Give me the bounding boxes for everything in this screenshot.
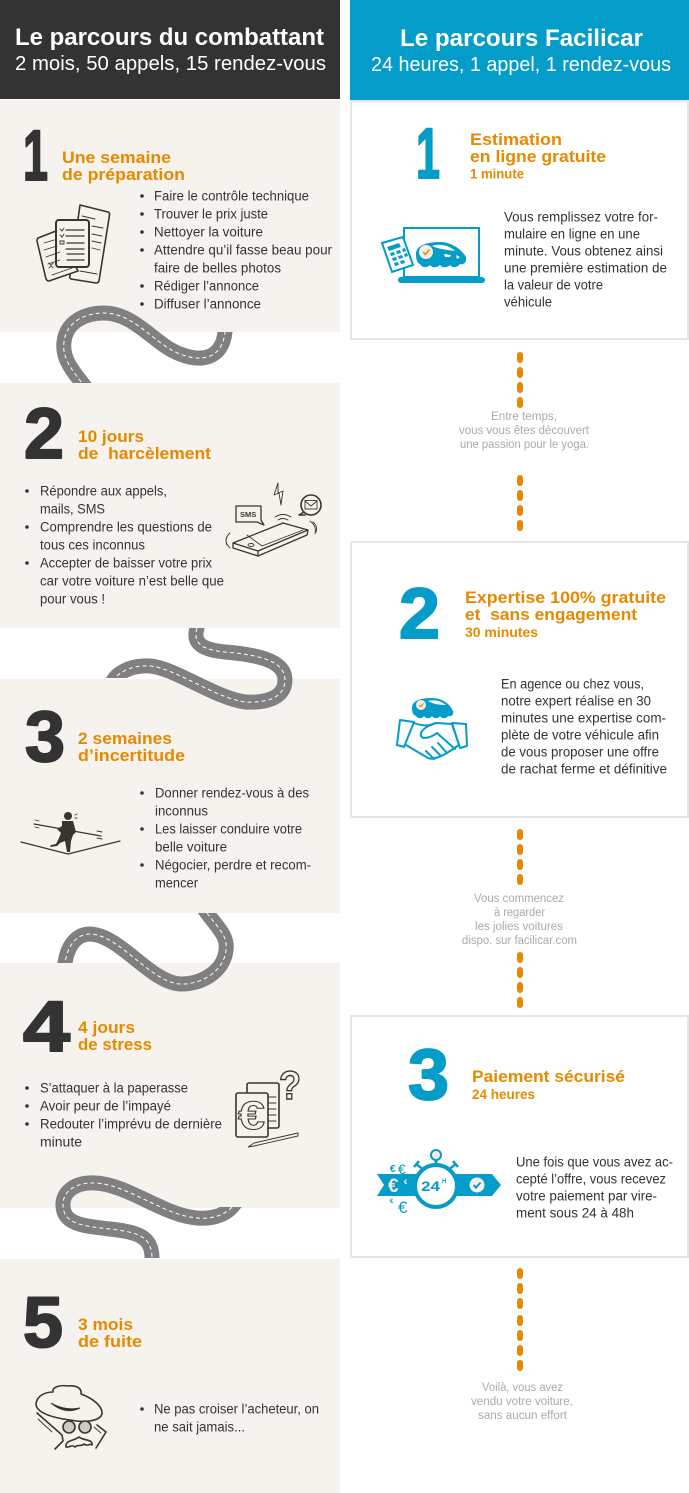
description: online form: mulaire en ligne en une	[504, 226, 640, 242]
heading: 10 jours de harcèlement: 10 jours	[78, 427, 144, 446]
list: uncertainty tasks: inconnus	[155, 804, 208, 818]
heading: 4 jours de stress	[78, 1018, 152, 1054]
description: online form: Vous remplissez votre for-	[504, 210, 658, 224]
list: stress tasks: Redouter l’imprévu de dernière	[40, 1116, 222, 1132]
list: harassment tasks: mails, SMS	[40, 502, 105, 516]
icon: euro paperwork: €	[238, 1094, 265, 1138]
heading: estimation en ligne gratuite: Estimation	[470, 130, 562, 149]
number 2 blue: 2	[399, 575, 440, 654]
heading: 2 semaines d'incertitude	[78, 729, 185, 765]
heading: 10 jours de harcèlement: de harcèlement	[78, 444, 211, 463]
heading: paiement sécurisé	[472, 1067, 625, 1102]
heading: une semaine de préparation	[62, 148, 185, 184]
list: preparation tasks: Nettoyer la voiture	[154, 224, 263, 240]
heading: estimation en ligne gratuite: en ligne gratuite	[470, 147, 606, 166]
heading: 4 jours de stress: 4 jours	[78, 1018, 135, 1037]
heading: 3 mois de fuite	[78, 1315, 142, 1351]
description: appraisal: plète de votre véhicule afin	[501, 728, 659, 742]
heading: une semaine de préparation: de préparation	[62, 165, 185, 184]
road 2	[108, 618, 285, 702]
number 3 blue: 3	[408, 1036, 449, 1115]
list: harassment tasks: car votre voiture n’est belle que	[40, 574, 224, 588]
aside: browsing cars: Vous commencez	[474, 893, 564, 905]
number 1 blue: 1	[416, 115, 440, 194]
list: uncertainty tasks: Donner rendez-vous à des	[155, 786, 309, 800]
aside: car sold: sans aucun effort	[478, 1410, 568, 1422]
icon: stopwatch on ribbon with euros: €	[398, 1198, 408, 1217]
list: uncertainty tasks: mencer	[155, 876, 198, 890]
right column header: 24 heures, 1 appel, 1 rendez-vous	[371, 54, 671, 76]
list: preparation tasks: Attendre qu’il fasse beau pour	[154, 242, 332, 258]
description: payment: cepté l’offre, vous recevez	[516, 1172, 666, 1186]
right column header: Le parcours Facilicar	[400, 25, 643, 52]
dotted connector 1b	[517, 475, 523, 531]
aside: yoga	[459, 411, 590, 451]
heading: expertise gratuite: et sans engagement	[465, 605, 637, 624]
aside: car sold: Voilà, vous avez	[482, 1382, 563, 1394]
icon: stopwatch on ribbon with euros	[377, 1150, 501, 1217]
icon: disguised spy	[36, 1386, 106, 1449]
heading: 2 semaines d'incertitude: 2 semaines	[78, 729, 172, 748]
list: uncertainty tasks: Négocier, perdre et recom-	[155, 858, 311, 872]
left column header	[0, 0, 340, 99]
icon: stopwatch on ribbon with euros: €	[390, 1164, 396, 1175]
icon: stopwatch on ribbon with euros: €	[390, 1199, 394, 1205]
list: escape task: Ne pas croiser l’acheteur, on	[154, 1402, 319, 1416]
description: payment: votre paiement par vire-	[516, 1188, 657, 1204]
icon: stopwatch on ribbon with euros: €	[388, 1176, 399, 1197]
aside: car sold	[471, 1382, 573, 1422]
list: preparation tasks: Rédiger l’annonce	[154, 278, 259, 294]
list: preparation tasks: Faire le contrôle technique	[154, 188, 309, 204]
list: preparation tasks: faire de belles photos	[154, 260, 281, 276]
description: online form: véhicule	[504, 294, 552, 310]
icon: stopwatch on ribbon with euros: H	[442, 1179, 446, 1185]
icon: ringing phone: SMS	[240, 510, 256, 519]
icon: documents	[37, 205, 110, 283]
list: escape task	[140, 1402, 319, 1434]
list: stress tasks: Avoir peur de l’impayé	[40, 1098, 171, 1114]
dotted connector 2b	[517, 952, 523, 1008]
icon: stopwatch on ribbon with euros: €	[404, 1180, 408, 1186]
card: secure payment	[351, 1016, 688, 1257]
icon: stopwatch on ribbon with euros: 24	[421, 1178, 440, 1194]
list: stress tasks	[25, 1080, 222, 1150]
icon: handshake with car	[397, 698, 467, 759]
description: appraisal: de rachat ferme et définitive	[501, 762, 667, 776]
dotted connector 1a	[517, 352, 523, 408]
panel: step 2 harassment	[0, 383, 340, 628]
icon: stopwatch on ribbon with euros: €	[398, 1161, 406, 1177]
heading: expertise gratuite: 30 minutes	[465, 625, 538, 640]
number 5: 5	[23, 1284, 63, 1363]
heading: 10 jours de harcèlement	[78, 427, 211, 463]
list: preparation tasks: Diffuser l’annonce	[154, 296, 261, 312]
left column header: Le parcours du combattant	[15, 24, 324, 51]
description: appraisal: notre expert réalise en 30	[501, 694, 651, 708]
heading: 2 semaines d'incertitude: d’incertitude	[78, 746, 185, 765]
right column header	[350, 0, 689, 100]
dotted connector 3	[517, 1268, 523, 1371]
description: online form: une première estimation de	[504, 260, 667, 276]
number 4: 4	[23, 988, 71, 1067]
description: payment: ment sous 24 à 48h	[516, 1206, 634, 1220]
heading: 4 jours de stress: de stress	[78, 1035, 152, 1054]
road 4	[63, 1183, 240, 1268]
description: payment	[516, 1154, 673, 1220]
panel: step 5 escape	[0, 1259, 340, 1493]
aside: browsing cars	[462, 893, 577, 947]
list: stress tasks: S’attaquer à la paperasse	[40, 1080, 188, 1096]
heading: une semaine de préparation: Une semaine	[62, 148, 171, 167]
number 2: 2	[24, 395, 64, 474]
aside: yoga: vous vous êtes découvert	[459, 425, 590, 437]
panel: step 1 preparation	[0, 100, 340, 332]
dotted connector 2a	[517, 829, 523, 885]
list: preparation tasks: Trouver le prix juste	[154, 206, 268, 222]
aside: yoga: une passion pour le yoga.	[460, 439, 589, 451]
list: uncertainty tasks: Les laisser conduire votre	[155, 822, 302, 836]
card: online estimate	[351, 101, 688, 339]
number 1: 1	[23, 117, 48, 196]
aside: browsing cars: dispo. sur facilicar.com	[462, 935, 577, 947]
left column header: 2 mois, 50 appels, 15 rendez-vous	[15, 53, 326, 75]
heading: paiement sécurisé: Paiement sécurisé	[472, 1067, 625, 1086]
description: online form	[504, 210, 667, 310]
heading: 3 mois de fuite: de fuite	[78, 1332, 142, 1351]
aside: browsing cars: à regarder	[494, 907, 545, 919]
list: harassment tasks: pour vous !	[40, 592, 105, 606]
aside: browsing cars: les jolies voitures	[475, 921, 563, 933]
road 3	[64, 903, 226, 984]
list: harassment tasks: Accepter de baisser votre prix	[40, 556, 212, 570]
aside: yoga: Entre temps,	[491, 411, 557, 423]
heading: estimation en ligne gratuite: 1 minute	[470, 166, 524, 182]
list: uncertainty tasks: belle voiture	[155, 840, 227, 854]
description: online form: la valeur de votre	[504, 278, 603, 292]
description: appraisal: minutes une expertise com-	[501, 710, 666, 726]
heading: expertise gratuite: Expertise 100% gratuite	[465, 588, 666, 607]
list: harassment tasks: Répondre aux appels,	[40, 484, 167, 498]
panel: step 3 uncertainty	[0, 679, 340, 913]
list: escape task: ne sait jamais...	[154, 1420, 245, 1434]
icon: laptop with car and calculator	[382, 228, 485, 283]
aside: car sold: vendu votre voiture,	[471, 1396, 573, 1408]
list: stress tasks: minute	[40, 1134, 82, 1150]
list: uncertainty tasks	[140, 786, 311, 890]
description: payment: Une fois que vous avez ac-	[516, 1154, 673, 1170]
heading: paiement sécurisé: 24 heures	[472, 1087, 535, 1102]
description: appraisal	[501, 676, 667, 776]
list: harassment tasks: Comprendre les questions de	[40, 520, 212, 534]
panel: step 4 stress	[0, 963, 340, 1208]
description: online form: minute. Vous obtenez ainsi	[504, 244, 663, 258]
list: preparation tasks	[140, 188, 332, 312]
icon: euro paperwork	[236, 1064, 301, 1147]
list: harassment tasks: tous ces inconnus	[40, 538, 145, 552]
number 3: 3	[25, 698, 65, 777]
description: appraisal: de vous proposer une offre	[501, 744, 659, 760]
heading: 3 mois de fuite: 3 mois	[78, 1315, 133, 1334]
icon: tightrope walker	[21, 812, 120, 854]
list: harassment tasks	[25, 484, 224, 606]
description: appraisal: En agence ou chez vous,	[501, 676, 644, 692]
card: free appraisal	[351, 542, 688, 817]
heading: estimation en ligne gratuite	[470, 130, 606, 182]
road 1	[64, 313, 226, 393]
heading: expertise gratuite	[465, 588, 666, 640]
icon: ringing phone	[226, 483, 321, 556]
icon: euro paperwork: ?	[279, 1064, 301, 1108]
